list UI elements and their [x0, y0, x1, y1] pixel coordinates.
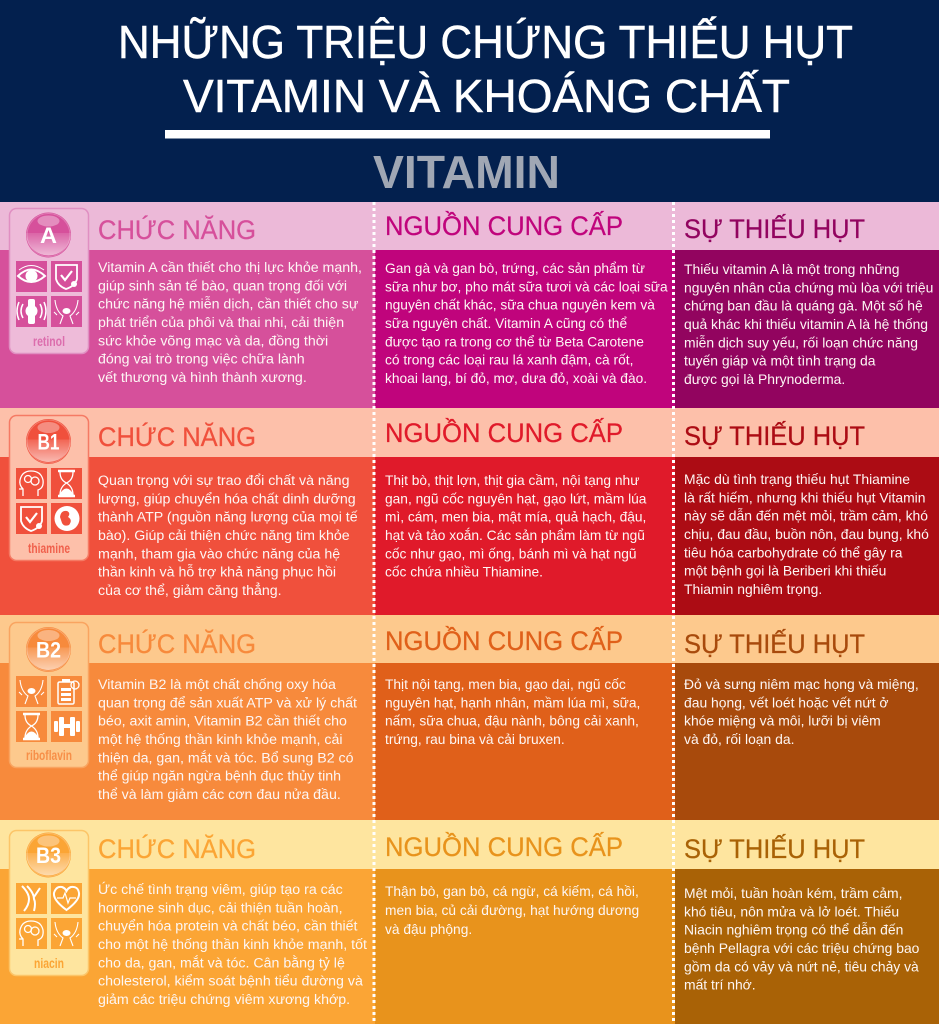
badge circle: B2: B2 [36, 638, 61, 662]
icon: heart [51, 883, 82, 914]
text: sources B1: cốc chứa nhiều Thiamine. [385, 565, 543, 580]
text: function B1 [98, 473, 358, 599]
text: function A: giúp sinh sản tế bào, quan trọng đối với [98, 278, 347, 294]
badge card: vitamin B1 thiamine [10, 416, 88, 560]
text: sources B1 [385, 473, 647, 580]
text: deficiency A [684, 261, 933, 387]
icon: bone joint [16, 296, 47, 327]
text: deficiency B3: gồm da có vảy và nứt nẻ, tiêu chảy và [684, 958, 919, 974]
title: NHỮNG TRIỆU CHỨNG THIẾU HỤT [118, 16, 853, 68]
badge circle: B3: B3 [36, 843, 61, 868]
text: deficiency B3: khó tiêu, nôn mửa và lở loét. Thiếu [684, 903, 899, 919]
text: deficiency A: miễn dịch suy yếu, rối loạn chức năng [684, 334, 918, 350]
text: sources A: nguyên chất khác, sữa chua nguyên kem và [385, 298, 655, 313]
text: sources B3: và đậu phộng. [385, 922, 472, 937]
text: function B1: bào). Giúp cải thiện chức năng tim khỏe [98, 528, 350, 544]
text: function B2: một hệ thống thần kinh khỏe mạnh, cải [98, 732, 342, 748]
text: sources B1: hạt và tảo xoắn. Các sản phẩm làm từ ngũ [385, 527, 645, 543]
row: vitamin B3 [0, 820, 939, 1024]
icon: hourglass [16, 711, 47, 742]
heading: chức năng B1: CHỨC NĂNG [98, 422, 256, 452]
icon: hourglass [51, 468, 82, 499]
text: deficiency B1: chịu, đau đầu, buồn nôn, đau bụng, khó [684, 526, 929, 542]
text: function A: sức khỏe võng mạc và da, đồng thời [98, 333, 328, 349]
text: sources B2: Thịt nội tạng, men bia, gạo dại, ngũ cốc [385, 677, 626, 692]
text: deficiency B2: khóe miệng và môi, lưỡi bị viêm [684, 713, 881, 729]
text: function B1: thành ATP (nguồn năng lượng của mọi tế [98, 510, 358, 526]
text: function A [98, 260, 362, 386]
text: function B1: thần kinh và hỗ trợ khả năng phục hồi [98, 564, 336, 581]
icon: dumbbell [51, 711, 82, 742]
text: sources A: sữa nguyên chất. Vitamin A cũng có thể [385, 316, 627, 331]
text: function B1: Quan trọng với sự trao đổi chất và năng [98, 473, 349, 489]
badge card: vitamin A retinol [10, 208, 88, 354]
text: sources B2: trứng, rau bina và cải bruxen. [385, 732, 565, 747]
text: function B3: Ức chế tình trạng viêm, giúp tạo ra các [98, 881, 343, 898]
text: function B3: cholesterol, kiểm soát bệnh tiểu đường và [98, 974, 363, 990]
badge circle: B1 [26, 419, 71, 464]
text: function B3: cho một hệ thống thần kinh khỏe mạnh, tốt [98, 937, 367, 953]
text: deficiency B1 [684, 471, 929, 597]
title [118, 16, 853, 122]
text: function B2: quan trọng để sản xuất ATP và xử lý chất [98, 695, 357, 711]
text: deficiency B1: Thiamin nghiêm trọng. [684, 581, 822, 597]
heading: sự thiếu hụt B3: SỰ THIẾU HỤT [684, 834, 865, 864]
label: thiamine: thiamine [28, 541, 70, 556]
text: deficiency A: quả khác khi thiếu vitamin A là hệ thống [684, 316, 928, 332]
text: sources A: khoai lang, bí đỏ, mơ, dưa đỏ, xoài và đào. [385, 371, 647, 386]
text: deficiency A: nguyên nhân của chứng mù lòa với triệu [684, 279, 933, 295]
heading: sự thiếu hụt B2: SỰ THIẾU HỤT [684, 629, 865, 659]
badge circle: B3 [26, 832, 71, 878]
badge circle: A [26, 212, 71, 258]
icon: throat [51, 918, 82, 949]
label: retinol: retinol [33, 334, 65, 349]
badge circle: B1: B1 [38, 430, 60, 454]
icon: throat [51, 296, 82, 327]
text: deficiency B2: đau họng, vết loét hoặc vết nứt ở [684, 694, 889, 710]
heading: nguồn cung cấp B1: NGUỒN CUNG CẤP [385, 418, 623, 448]
text: sources B3: men bia, củ cải đường, hạt hướng dương [385, 903, 639, 918]
text: function A: vết thương và hình thành xương. [98, 370, 307, 386]
text: sources B1: gan, ngũ cốc nguyên hạt, gạo lứt, mầm lúa [385, 491, 647, 506]
icon: battery [51, 676, 82, 707]
column dividers [374, 202, 674, 1024]
text: function B3: giảm các triệu chứng viêm xương khớp. [98, 992, 350, 1008]
text: function B1: mạnh, tham gia vào chức năng của hệ [98, 546, 340, 562]
text: deficiency B1: một bệnh gọi là Beriberi khi thiếu [684, 563, 886, 579]
text: sources B1: Thịt bò, thịt lợn, thịt gia cầm, nội tạng như [385, 473, 639, 488]
text: function B3: hormone sinh dục, cải thiện tuần hoàn, [98, 900, 343, 916]
heading: chức năng B2: CHỨC NĂNG [98, 629, 256, 659]
title underline [165, 130, 770, 138]
text: function B3: chuyển hóa protein và chất béo, cần thiết [98, 919, 358, 935]
badge circle: B2 [26, 627, 71, 672]
text: deficiency B2: và đỏ, rối loạn da. [684, 731, 794, 747]
text: deficiency B1: Mặc dù tình trạng thiếu hụt Thiamine [684, 471, 910, 487]
text: deficiency B3 [684, 885, 920, 993]
text: sources B1: cốc như gạo, mì ống, bánh mì và hạt ngũ [385, 546, 637, 561]
text: deficiency A: được gọi là Phrynoderma. [684, 371, 845, 387]
heading: chức năng B3: CHỨC NĂNG [98, 834, 256, 864]
text: function B1: của cơ thể, giảm căng thẳng. [98, 581, 282, 599]
row: vitamin A [0, 202, 939, 408]
text: function B2: Vitamin B2 là một chất chống oxy hóa [98, 677, 336, 693]
text: function B2: thể và làm giảm các cơn đau nửa đầu. [98, 787, 341, 803]
text: deficiency B2: Đỏ và sưng niêm mạc họng và miệng, [684, 676, 919, 692]
icon: throat [16, 676, 47, 707]
text: sources B3 [385, 884, 639, 937]
heading: nguồn cung cấp B2: NGUỒN CUNG CẤP [385, 626, 623, 656]
text: deficiency B3: mất trí nhớ. [684, 977, 756, 993]
text: function A: phát triển của phôi và thai nhi, cải thiện [98, 315, 344, 331]
text: deficiency A: chứng ban đầu là quáng gà. Một số hệ [684, 298, 923, 314]
text: deficiency B3: Niacin nghiêm trọng có thể dẫn đến [684, 922, 903, 938]
icon: brain [16, 468, 47, 499]
text: deficiency A: tuyến giáp và một tình trạng da [684, 353, 876, 369]
icon: brain [16, 918, 47, 949]
text: sources A: sữa như bơ, pho mát sữa tươi và các loại sữa [385, 279, 668, 294]
row: vitamin B2 [0, 615, 939, 820]
text: function B2: thiện da, gan, mắt và tóc. Bổ sung B2 có [98, 749, 354, 766]
row: vitamin B1 [0, 408, 939, 615]
text: function B3 [98, 881, 367, 1008]
text: sources A: được tạo ra trong cơ thể từ Beta Carotene [385, 334, 644, 349]
icon: fetus [51, 503, 82, 534]
label: niacin: niacin [34, 956, 64, 971]
text: function A: đóng vai trò trong việc chữa lành [98, 352, 305, 368]
text: sources A [385, 261, 668, 386]
badge card: vitamin B3 niacin [10, 830, 88, 976]
icon: knee [16, 883, 47, 914]
text: sources B2: nguyên hạt, hạnh nhân, mầm lúa mì, sữa, [385, 695, 640, 710]
icon: shield [16, 503, 47, 534]
label: riboflavin: riboflavin [26, 748, 72, 763]
text: sources A: Gan gà và gan bò, trứng, các sản phẩm từ [385, 261, 645, 276]
text: function B2 [98, 677, 357, 803]
text: deficiency A: Thiếu vitamin A là một trong những [684, 261, 899, 277]
header background [0, 0, 939, 202]
icon: shield [51, 261, 82, 292]
text: function A: chức năng hệ miễn dịch, cần thiết cho sự [98, 296, 359, 313]
heading: nguồn cung cấp A: NGUỒN CUNG CẤP [385, 211, 623, 241]
title: VITAMIN VÀ KHOÁNG CHẤT [183, 70, 790, 122]
text: sources B2 [385, 677, 640, 747]
section heading: vitamin: VITAMIN [373, 146, 560, 198]
text: sources B3: Thận bò, gan bò, cá ngừ, cá kiếm, cá hồi, [385, 884, 639, 899]
heading: nguồn cung cấp B3: NGUỒN CUNG CẤP [385, 832, 623, 862]
text: function B2: béo, axit amin, Vitamin B2 cần thiết cho [98, 714, 347, 730]
text: function A: Vitamin A cần thiết cho thị lực khỏe mạnh, [98, 260, 362, 276]
heading: chức năng A: CHỨC NĂNG [98, 215, 256, 245]
heading: sự thiếu hụt B1: SỰ THIẾU HỤT [684, 421, 865, 451]
text: deficiency B1: là rất hiếm, nhưng khi thiếu hụt Vitamin [684, 489, 925, 505]
text: deficiency B3: bệnh Pellagra với các triệu chứng bao [684, 940, 920, 956]
text: sources A: có trong các loại rau lá xanh đậm, cà rốt, [385, 353, 633, 368]
text: function B3: cho da, gan, mắt và tóc. Cân bằng tỷ lệ [98, 954, 345, 971]
icon: eye [16, 261, 47, 292]
text: sources B2: nấm, sữa chua, đậu nành, bông cải xanh, [385, 714, 639, 729]
text: function B1: lượng, giúp chuyển hóa chất dinh dưỡng [98, 491, 356, 507]
text: sources B1: mì, cám, men bia, mật mía, quả hạch, đậu, [385, 510, 646, 525]
badge circle: A: A [40, 223, 57, 248]
text: function B2: thể giúp ngăn ngừa bệnh đục thủy tinh [98, 769, 341, 785]
badge card: vitamin B2 riboflavin [10, 622, 88, 768]
heading: sự thiếu hụt A: SỰ THIẾU HỤT [684, 214, 865, 244]
text: deficiency B2 [684, 676, 919, 747]
text: deficiency B1: tiêu hóa carbohydrate có thể gây ra [684, 544, 903, 560]
text: deficiency B3: Mệt mỏi, tuần hoàn kém, trầm cảm, [684, 885, 902, 901]
text: deficiency B1: này sẽ dẫn đến mệt mỏi, trầm cảm, khó [684, 508, 928, 524]
